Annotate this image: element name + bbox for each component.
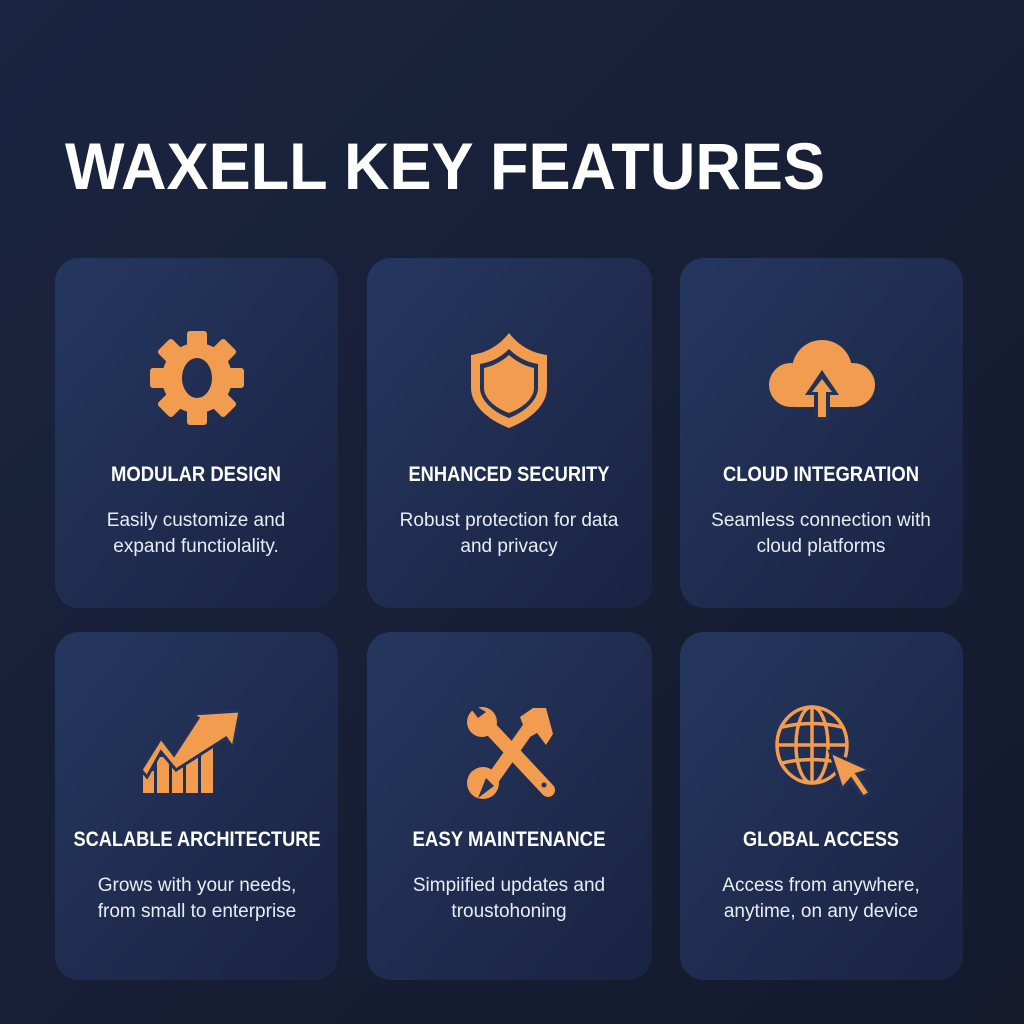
text block: cloud platforms bbox=[757, 536, 885, 557]
icon: growth chart bbox=[141, 711, 240, 793]
panel: enhanced security bbox=[367, 258, 652, 608]
text block: Access from anywhere, bbox=[722, 875, 920, 896]
icon: gear bbox=[131, 312, 263, 444]
icon: shield bbox=[471, 333, 547, 428]
text block: Simpiified updates and bbox=[413, 875, 605, 896]
icon: wrench and hammer bbox=[467, 705, 553, 799]
text block: troustohoning bbox=[451, 901, 567, 922]
heading: SCALABLE ARCHITECTURE bbox=[74, 828, 320, 851]
panel: cloud integration bbox=[680, 258, 963, 608]
text block: Easily customize and bbox=[107, 510, 285, 531]
text block: and privacy bbox=[460, 536, 558, 557]
text block: Grows with your needs, bbox=[98, 875, 296, 896]
text block: from small to enterprise bbox=[98, 901, 296, 922]
text block: anytime, on any device bbox=[724, 901, 918, 922]
panel: global access bbox=[680, 632, 963, 980]
panel: easy maintenance bbox=[367, 632, 652, 980]
heading: GLOBAL ACCESS bbox=[743, 828, 899, 851]
heading: CLOUD INTEGRATION bbox=[723, 463, 919, 486]
text block: expand functiolality. bbox=[113, 536, 279, 557]
heading: EASY MAINTENANCE bbox=[412, 828, 606, 851]
panel: modular design bbox=[55, 258, 338, 608]
title: WAXELL KEY FEATURES bbox=[65, 129, 825, 203]
text block: Robust protection for data bbox=[400, 510, 619, 531]
heading: ENHANCED SECURITY bbox=[408, 463, 610, 486]
panel: scalable architecture bbox=[55, 632, 338, 980]
icon: cloud upload bbox=[769, 340, 875, 420]
text block: Seamless connection with bbox=[711, 510, 931, 531]
icon: globe with cursor bbox=[777, 707, 870, 797]
heading: MODULAR DESIGN bbox=[111, 463, 281, 486]
